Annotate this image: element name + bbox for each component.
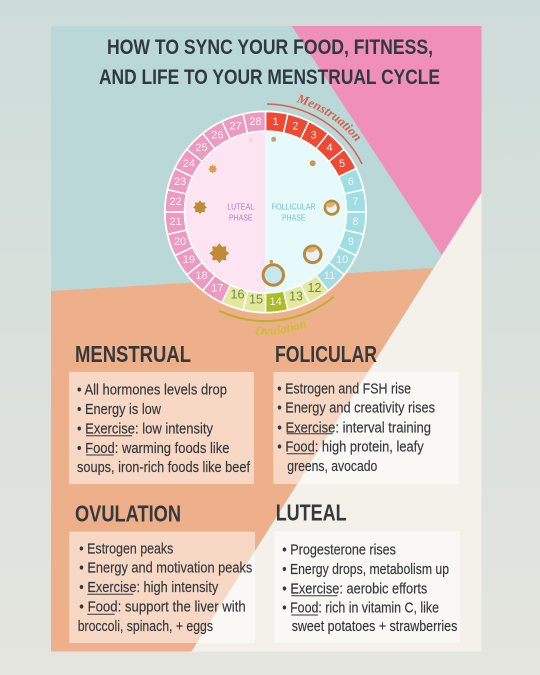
day numbers: 4 [326,142,333,154]
cycle wheel [163,109,368,315]
day numbers: 19 [183,254,195,266]
follicular phase label [272,202,316,222]
day numbers: 27 [229,121,242,133]
day numbers: 16 [231,288,244,302]
luteal text [282,541,457,635]
folicular text: greens, avocado [287,458,377,475]
day numbers [169,116,358,308]
day numbers: 13 [289,290,303,304]
day numbers: 2 [292,121,298,133]
folicular text: • Food: high protein, leafy [277,439,424,456]
heading: luteal: LUTEAL [276,500,347,526]
day numbers: 15 [249,292,263,306]
day numbers: 8 [352,216,358,228]
day numbers: 17 [211,283,224,295]
title [99,35,440,89]
menstrual card [69,372,254,484]
luteal phase label: PHASE [229,214,252,222]
day numbers: 11 [324,270,335,282]
follicular half [266,132,346,292]
menstrual text: • All hormones levels drop [77,382,227,398]
luteal phase label [227,202,255,222]
luteal text: • Progesterone rises [282,541,396,558]
ovulation text: • Exercise: high intensity [79,579,219,596]
title: AND LIFE TO YOUR MENSTRUAL CYCLE [99,65,440,89]
folicular text: • Exercise: interval training [277,419,431,436]
ovulation card [69,532,255,643]
day numbers: 18 [195,270,208,282]
panel: menstrual [69,341,254,484]
wheel rim [164,110,367,314]
folicular text [277,380,435,475]
day numbers: 10 [336,254,348,266]
ovulation arc and label [218,296,334,336]
day numbers: 20 [174,236,186,248]
menstrual text [77,382,251,476]
day numbers: 5 [339,158,345,170]
day segments [163,109,368,315]
follicular phase label: FOLLICULAR [272,202,316,212]
day numbers: 1 [273,116,279,128]
panel: luteal [274,500,460,643]
day numbers: 26 [211,129,224,141]
icon: follicle growth stages [263,137,338,285]
day numbers: 9 [348,236,354,248]
luteal text: • Exercise: aerobic efforts [282,580,427,597]
menstrual text: soups, iron-rich foods like beef [77,459,251,476]
luteal text: • Energy drops, metabolism up [282,561,449,578]
luteal text: • Food: rich in vitamin C, like [282,599,439,616]
day numbers: 25 [195,142,208,154]
poster background shapes [51,26,482,652]
day numbers: 23 [174,176,186,188]
ovulation text: broccoli, spinach, + eggs [78,618,213,635]
follicular phase label: PHASE [282,214,305,222]
heading: menstrual: MENSTRUAL [75,341,191,367]
title: HOW TO SYNC YOUR FOOD, FITNESS, [107,35,433,59]
heading: ovulation: OVULATION [75,501,181,527]
panel: folicular [273,341,459,484]
heading: folicular: FOLICULAR [275,341,377,367]
luteal half [185,132,266,292]
day numbers: 21 [169,216,182,228]
day numbers: 28 [249,116,262,128]
ovulation text: • Food: support the liver with [79,599,246,616]
folicular text: • Estrogen and FSH rise [277,380,411,397]
day numbers: 3 [311,129,317,141]
day numbers: 12 [308,281,321,295]
day numbers: 14 [269,296,282,308]
ovulation text [78,540,252,635]
day numbers: 6 [348,176,354,188]
day numbers: 22 [169,196,182,208]
menstrual text: • Food: warming foods like [77,440,230,457]
menstrual text: • Energy is low [77,401,161,418]
folicular text: • Energy and creativity rises [277,399,435,416]
luteal phase label: LUTEAL [227,202,255,212]
icon: corpus luteum stages [193,138,253,263]
day numbers: 24 [183,158,195,170]
menstruation arc and label: Menstruation [296,94,360,142]
luteal card [274,531,460,643]
day numbers: 7 [352,196,358,208]
ovulation arc and label: Ovulation [256,321,307,336]
menstrual text: • Exercise: low intensity [77,420,213,438]
panel: ovulation [69,501,255,643]
ovulation text: • Energy and motivation peaks [79,559,252,576]
menstruation arc and label [267,94,363,164]
ovulation text: • Estrogen peaks [79,540,173,557]
luteal text: sweet potatoes + strawberries [292,618,457,635]
folicular card [273,372,459,484]
